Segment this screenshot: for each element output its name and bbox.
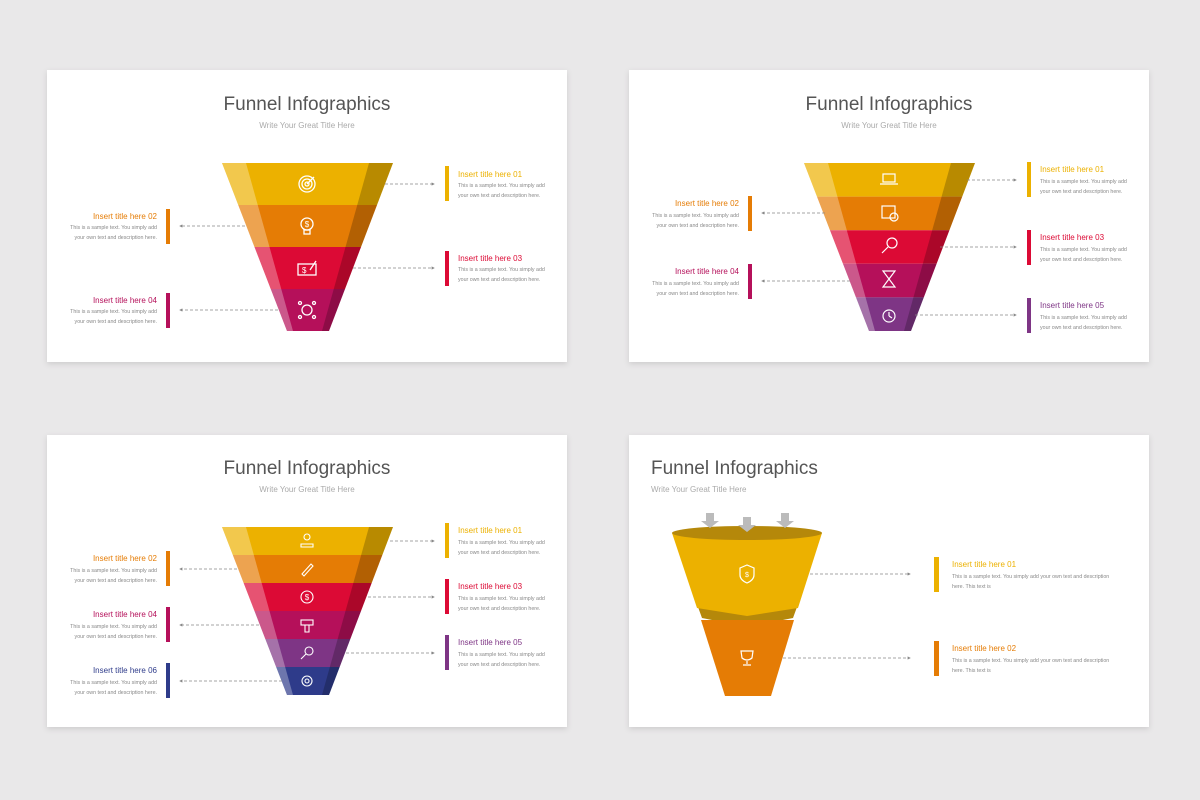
icon: shield [740, 565, 754, 583]
icons [301, 534, 313, 686]
text: item 02: This is a sample text. You simply add [70, 225, 157, 231]
icon: network user [298, 302, 316, 318]
text items [934, 557, 1109, 676]
funnel chart: $ [305, 593, 310, 602]
text items: your own text and description here. [75, 578, 157, 584]
text items: Insert title here 03 [1040, 233, 1105, 242]
text: item 03: your own text and description here. [458, 277, 540, 283]
arrows [180, 184, 434, 310]
text items: Insert title here 02 [93, 554, 158, 563]
arrows [762, 180, 1016, 315]
text items: Insert title here 05 [458, 638, 523, 647]
text items: This is a sample text. You simply add [70, 624, 157, 630]
arrows [180, 541, 434, 681]
title: Funnel Infographics [224, 94, 390, 115]
text items: Insert title here 01 [458, 526, 523, 535]
panel: top-right funnel (5 steps) [629, 70, 1149, 362]
text: item 02 [70, 209, 170, 244]
panel: bottom-left funnel (6 steps) [47, 435, 567, 727]
subtitle: Write Your Great Title Here [651, 485, 747, 494]
text items: Insert title here 04 [93, 610, 158, 619]
text: item 01: This is a sample text. You simply add [458, 183, 545, 189]
text: item 02: Insert title here 02 [93, 212, 158, 221]
funnel chart [672, 526, 822, 696]
text items: here. This text is [952, 668, 991, 674]
text items: Insert title here 02 [675, 199, 740, 208]
text items: This is a sample text. You simply add [70, 568, 157, 574]
subtitle: Write Your Great Title Here [259, 121, 355, 130]
funnel chart [222, 527, 393, 695]
text: item 01: Insert title here 01 [458, 170, 523, 179]
text: item 04: your own text and description here. [75, 319, 157, 325]
text items: your own text and description here. [75, 690, 157, 696]
text items: This is a sample text. You simply add [458, 596, 545, 602]
icons [880, 174, 898, 322]
text items: your own text and description here. [75, 634, 157, 640]
text items: your own text and description here. [458, 606, 540, 612]
text items: This is a sample text. You simply add [652, 213, 739, 219]
panel: top-left funnel (4 steps) [47, 70, 567, 362]
text: item 02: your own text and description here. [75, 235, 157, 241]
text items: your own text and description here. [1040, 189, 1122, 195]
text items: This is a sample text. You simply add [1040, 315, 1127, 321]
panel: bottom-right two-stage funnel [629, 435, 1149, 727]
text items: This is a sample text. You simply add your own text and description [952, 574, 1109, 580]
title: Funnel Infographics [651, 458, 818, 479]
icon: trophy [741, 651, 753, 665]
text items: This is a sample text. You simply add [1040, 247, 1127, 253]
text: item 03 [445, 251, 545, 286]
text: item 03: This is a sample text. You simply add [458, 267, 545, 273]
subtitle: Write Your Great Title Here [259, 485, 355, 494]
text items: This is a sample text. You simply add [458, 652, 545, 658]
text items: This is a sample text. You simply add [652, 281, 739, 287]
subtitle: Write Your Great Title Here [841, 121, 937, 130]
icon: bulb [301, 218, 313, 234]
funnel chart [222, 163, 393, 331]
title: Funnel Infographics [224, 458, 390, 479]
text: item 01: your own text and description here. [458, 193, 540, 199]
text: item 03: Insert title here 03 [458, 254, 523, 263]
icon: down arrows [701, 513, 794, 532]
text: item 04: Insert title here 04 [93, 296, 158, 305]
text: item 04: This is a sample text. You simply add [70, 309, 157, 315]
text items: your own text and description here. [458, 662, 540, 668]
icon: bulb: $ [305, 220, 310, 229]
text items: This is a sample text. You simply add [458, 540, 545, 546]
text items: Insert title here 06 [93, 666, 158, 675]
text items [652, 162, 1127, 333]
text items: This is a sample text. You simply add your own text and description [952, 658, 1109, 664]
text items: Insert title here 01 [952, 560, 1017, 569]
text items: your own text and description here. [657, 291, 739, 297]
text items: This is a sample text. You simply add [1040, 179, 1127, 185]
text items: Insert title here 03 [458, 582, 523, 591]
funnel chart [804, 163, 975, 331]
text items: your own text and description here. [458, 550, 540, 556]
icon: cheque: $ [302, 266, 307, 275]
icon: target [299, 176, 315, 192]
text items: This is a sample text. You simply add [70, 680, 157, 686]
arrows [783, 574, 910, 658]
title: Funnel Infographics [806, 94, 972, 115]
text: item 04 [70, 293, 170, 328]
text items: your own text and description here. [657, 223, 739, 229]
icon: cheque [298, 261, 316, 275]
text: item 01 [445, 166, 545, 201]
text items: Insert title here 01 [1040, 165, 1105, 174]
text items: your own text and description here. [1040, 257, 1122, 263]
text items: Insert title here 05 [1040, 301, 1105, 310]
text items: your own text and description here. [1040, 325, 1122, 331]
text items [70, 523, 545, 698]
funnel chart: $ [745, 572, 749, 579]
text items: here. This text is [952, 584, 991, 590]
text items: Insert title here 02 [952, 644, 1017, 653]
text items: Insert title here 04 [675, 267, 740, 276]
